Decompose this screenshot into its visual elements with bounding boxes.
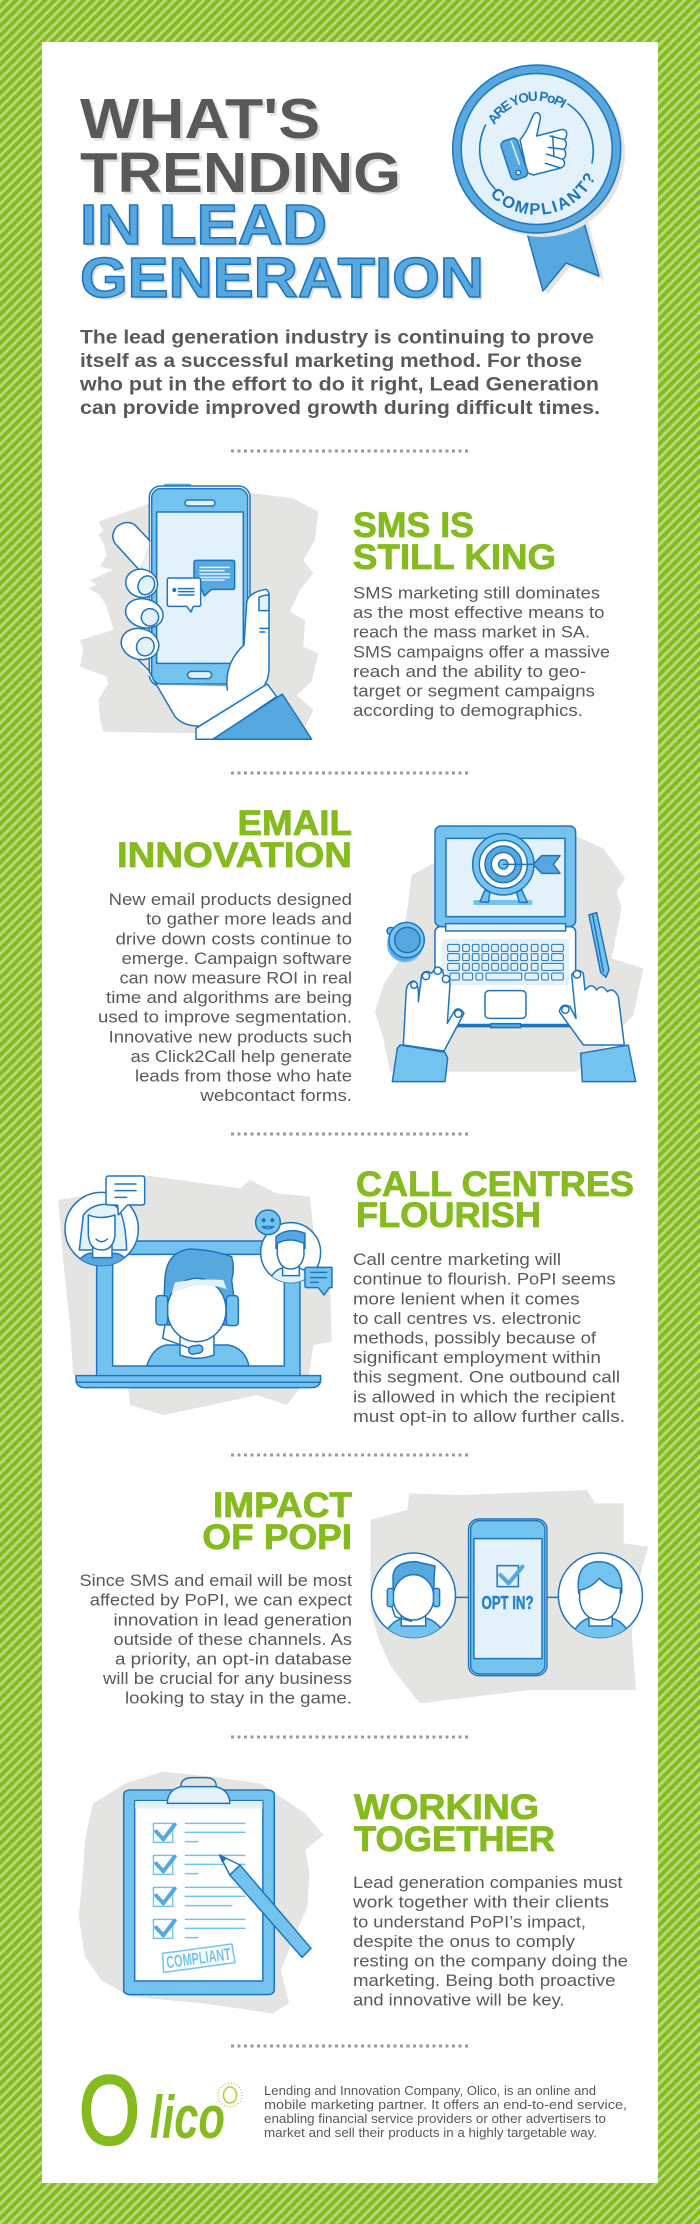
monitor [76,1241,321,1388]
illustration: compliance clipboard [79,1772,324,2013]
badge text: ARE YOU PoPI [489,91,567,125]
body text: innovation in lead generation [114,1610,352,1629]
right hand [559,970,636,1082]
body text: Lead generation companies must [353,1873,623,1892]
body text: target or segment campaigns [353,682,595,700]
coffee cup [387,922,424,962]
body text: SMS marketing still dominates [353,584,600,602]
title: WHAT'S [82,90,322,154]
illustration: hand holding phone [80,485,318,739]
body text [353,584,610,720]
laptop [435,826,576,1028]
heading: CALL CENTRES [356,1164,634,1204]
title: TRENDING [82,144,404,208]
body text: New email products designed [109,890,352,909]
main agent with headset [147,1249,249,1366]
body text: as Click2Call help generate [131,1047,352,1066]
target with arrow [473,834,560,905]
body text: SMS campaigns offer a massive [353,642,610,661]
customer woman [65,1176,145,1272]
body text: according to demographics. [353,701,583,720]
heading: SMS IS [353,505,474,545]
badge: are you PoPI compliant [452,64,625,295]
body text: Innovative new products such [109,1027,352,1046]
body text: Since SMS and email will be most [80,1571,352,1590]
heading: FLOURISH [356,1195,541,1235]
title: GENERATION [80,246,484,310]
body text [353,1250,625,1426]
intro paragraph: who put in the effort to do it right, Lead Generation [79,374,599,396]
heading [202,1485,352,1557]
body text: more lenient when it comes [353,1289,580,1308]
panel: impact of PoPI [80,1485,648,1708]
body text: reach and the ability to geo- [353,662,586,681]
badge ribbon [527,219,604,295]
customer avatar [558,1553,642,1640]
body text: leads from those who hate [135,1066,352,1086]
panel: SMS is still king [80,485,610,739]
illustration: video call agents [58,1175,332,1415]
keyboard [448,944,563,980]
agent avatar [371,1553,456,1640]
illustration: opt in phone between people [371,1490,648,1703]
body text: to understand PoPI’s impact, [353,1912,586,1931]
footer text: market and sell their products in a highly targetable way. [264,2126,597,2140]
body text: will be crucial for any business [102,1669,352,1688]
heading: TOGETHER [354,1819,555,1859]
body text: outside of these channels. As [114,1630,352,1649]
heading [353,505,556,577]
title: IN LEAD [80,193,327,257]
heading: EMAIL [238,803,352,843]
compliant stamp: COMPLIANT [165,1945,232,1972]
body text: as the most effective means to [353,603,604,622]
body text: webcontact forms. [199,1086,352,1105]
footer: Olico logo: O [79,2055,140,2165]
body text: to gather more leads and [146,910,352,929]
heading: WORKING [354,1787,539,1827]
body text: work together with their clients [352,1893,609,1912]
body text: used to improve segmentation. [98,1008,352,1027]
body text: continue to flourish. PoPI seems [353,1270,616,1289]
body text: and innovative will be key. [353,1991,564,2010]
body text: to call centres vs. electronic [353,1309,582,1328]
body text: time and algorithms are being [106,988,352,1007]
footer text [264,2084,627,2140]
body text: marketing. Being both proactive [353,1971,616,1990]
body text: a priority, an opt-in database [115,1650,352,1668]
body text: affected by PoPI, we can expect [90,1591,352,1610]
body text: emerge. Campaign software [122,949,352,968]
logo sun [218,2083,242,2107]
panel: call centres flourish [58,1164,634,1426]
body text: looking to stay in the game. [125,1689,352,1708]
body text: this segment. One outbound call [353,1368,620,1387]
body text: is allowed in which the recipient [353,1387,616,1406]
intro paragraph: can provide improved growth during difficult times. [80,397,600,419]
intro paragraph: itself as a successful marketing method. For those [80,350,582,372]
checklist [153,1823,245,1938]
illustration: laptop with target [375,826,643,1082]
panel: working together [79,1772,628,2013]
title: IN LEAD [82,196,330,260]
phone [469,1519,547,1676]
body text: must opt-in to allow further calls. [353,1407,625,1426]
body text [352,1873,628,2010]
clipboard [124,1778,274,1995]
intro paragraph: The lead generation industry is continuing to prove [80,326,594,348]
hand [113,523,269,726]
shirt cuff and sleeve [196,684,312,739]
body text [98,890,352,1105]
panel: email innovation [98,803,643,1105]
heading: IMPACT [213,1485,352,1525]
body text: reach the mass market in SA. [353,623,590,642]
body text: significant employment within [353,1348,601,1367]
left hand [392,967,464,1082]
body text: resting on the company doing the [353,1952,628,1970]
body text: Call centre marketing will [353,1250,561,1269]
pencil [589,913,609,977]
pencil [220,1855,311,1957]
footer: Olico logo [79,2055,242,2165]
heading [354,1787,555,1859]
heading [117,803,352,875]
title: TRENDING [80,141,401,205]
heading: OF POPI [202,1517,352,1557]
body text: methods, possibly because of [353,1328,596,1348]
intro paragraph [79,326,600,419]
customer man with smiley [256,1210,332,1295]
title [80,87,486,312]
opt in label: OPT IN? [482,1593,534,1613]
body text: can now measure ROI in real [120,968,352,988]
footer text: enabling financial service providers or other advertisers to [264,2112,606,2126]
footer text: mobile marketing partner. It offers an end-to-end service, [264,2098,627,2112]
badge: are you PoPI compliant: COMPLIANT? [492,173,594,215]
body text: despite the onus to comply [353,1932,576,1951]
chat bubbles [167,560,235,612]
heading: STILL KING [353,537,556,577]
heading: INNOVATION [117,835,352,875]
footer text: Lending and Innovation Company, Olico, is an online and [264,2084,596,2098]
title: GENERATION [82,248,486,312]
icon: thumbs up [500,113,567,181]
body text: drive down costs continue to [116,929,352,948]
heading [356,1164,634,1235]
title: WHAT'S [80,87,320,151]
body text [80,1571,352,1708]
footer: Olico logo: lico [150,2084,225,2151]
